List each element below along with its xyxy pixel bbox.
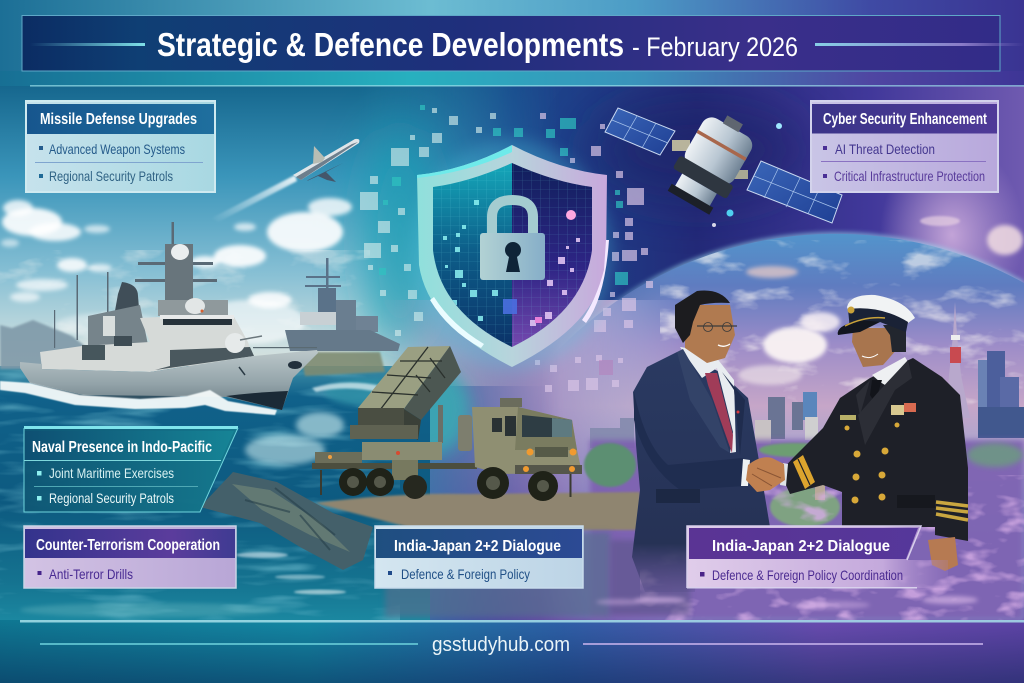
padlock — [480, 200, 545, 280]
footer — [0, 620, 1024, 683]
handshake — [746, 457, 788, 492]
band edge line — [30, 85, 1024, 87]
title text: Strategic & Defence Developments — [157, 26, 624, 63]
heading: India-Japan 2+2 Dialogue — [712, 538, 890, 555]
title bar — [22, 16, 1024, 71]
main warship — [0, 222, 318, 415]
shield with padlock — [412, 140, 612, 370]
heading: Missile Defense Upgrades — [40, 111, 197, 128]
data pixel cloud — [360, 105, 782, 392]
panel: india-japan right: Defence & Foreign Policy Coordination — [712, 567, 903, 583]
panel: missile defense — [26, 101, 215, 192]
cityscape — [590, 302, 1024, 448]
panel: naval presence: Regional Security Patrols — [49, 490, 174, 506]
footer website: gsstudyhub.com — [432, 634, 570, 656]
sky clouds — [0, 198, 370, 345]
lilac haze patches — [596, 596, 978, 609]
sea — [0, 366, 430, 620]
military missile launcher truck — [312, 346, 582, 501]
panel: cyber security — [811, 101, 998, 192]
panel: india-japan centre: Defence & Foreign Policy — [401, 566, 530, 582]
panel: naval presence — [24, 428, 238, 512]
panel: counter-terrorism: Anti-Terror Drills — [49, 566, 133, 582]
naval officer — [780, 295, 968, 571]
satellite — [605, 105, 842, 223]
panel: missile defense: Regional Security Patrols — [49, 168, 173, 184]
trees and ground — [200, 440, 1024, 620]
title date: - February 2026 — [632, 32, 798, 62]
panel: missile defense: Advanced Weapon Systems — [49, 141, 185, 157]
earth horizon — [558, 215, 1024, 620]
panel: cyber security: AI Threat Detection — [835, 141, 935, 157]
heading: Naval Presence in Indo-Pacific — [32, 439, 212, 456]
panel: india-japan right — [687, 526, 948, 588]
heading: India-Japan 2+2 Dialogue — [394, 538, 561, 555]
top colour band — [0, 0, 1024, 71]
airplane and contrail — [212, 139, 360, 222]
heading: Counter-Terrorism Cooperation — [36, 537, 220, 554]
panel: counter-terrorism — [24, 526, 236, 588]
distant mountains and shore — [0, 320, 385, 376]
panel: naval presence: Joint Maritime Exercises — [49, 465, 174, 481]
band under title — [0, 71, 1024, 86]
background scene — [0, 86, 1024, 620]
diplomat in suit — [632, 290, 770, 592]
second warship — [285, 258, 400, 351]
panel: india-japan centre — [375, 526, 583, 588]
